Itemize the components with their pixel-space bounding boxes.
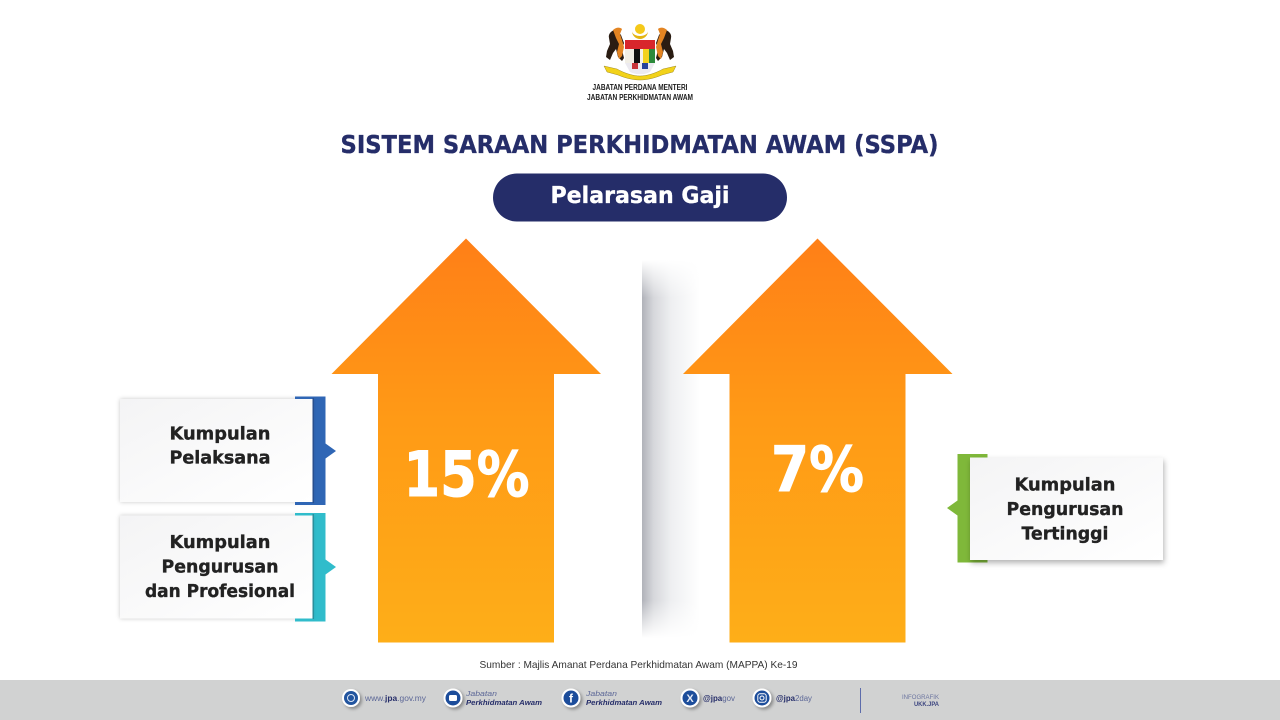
panel: Kumpulan Pengurusan Tertinggi: Pengurusan [1006, 500, 1124, 520]
logo: Malaysian coat of arms with department names [587, 24, 693, 102]
icon: facebook: f [569, 692, 574, 706]
icon: website [342, 689, 360, 707]
text: youtube: Perkhidmatan Awam [466, 698, 542, 707]
text: X handle: @jpagov [703, 694, 735, 703]
text: credit: UKK.JPA [914, 701, 939, 708]
icon: X [680, 688, 700, 708]
text: youtube [465, 689, 542, 707]
panel: Kumpulan Pelaksana [120, 396, 336, 505]
subtitle pill: Pelarasan Gaji: Pelarasan Gaji [550, 183, 730, 209]
panel: Kumpulan Pelaksana: Pelaksana [170, 448, 270, 468]
text: facebook [585, 689, 662, 707]
panel: Kumpulan Pengurusan Tertinggi: Kumpulan [1014, 476, 1116, 496]
icon: instagram [752, 688, 772, 708]
value: 15%: 15% [404, 438, 530, 511]
text: youtube: Jabatan [465, 689, 497, 698]
arrow: 15 percent [332, 238, 601, 642]
vertical divider shadow [642, 260, 700, 638]
text: facebook: Perkhidmatan Awam [586, 698, 662, 707]
value: 7%: 7% [771, 433, 864, 506]
text: website: www.jpa.gov.my [364, 694, 426, 703]
text: facebook: Jabatan [585, 689, 617, 698]
text: Jabatan Perkhidmatan Awam: JABATAN PERKHIDMATAN AWAM [587, 93, 693, 102]
panel: Kumpulan Pengurusan dan Profesional: Kumpulan [170, 533, 270, 553]
subtitle pill: Pelarasan Gaji [493, 174, 787, 222]
arrow: 7 percent [683, 238, 952, 642]
icon: facebook [562, 688, 580, 708]
text: instagram handle: @jpa2day [776, 694, 812, 703]
panel: Kumpulan Pengurusan dan Profesional: Pengurusan [162, 558, 278, 578]
footer bar [0, 680, 1280, 720]
panel: Kumpulan Pengurusan dan Profesional [120, 513, 336, 622]
text: credit [902, 694, 940, 708]
panel: Kumpulan Pengurusan Tertinggi [947, 454, 1163, 562]
panel: Kumpulan Pelaksana: Kumpulan [170, 424, 270, 444]
title: SISTEM SARAAN PERKHIDMATAN AWAM (SSPA) [340, 130, 938, 159]
icon: crest [604, 24, 676, 80]
panel: Kumpulan Pengurusan dan Profesional: dan Profesional [145, 582, 295, 602]
text: Jabatan Perdana Menteri: JABATAN PERDANA MENTERI [592, 83, 688, 92]
text: credit: INFOGRAFIK [902, 694, 940, 701]
icon: youtube [444, 688, 462, 708]
panel: Kumpulan Pengurusan Tertinggi: Tertinggi [1022, 524, 1108, 544]
icon: X: X [686, 693, 694, 705]
source note: Sumber : Majlis Amanat Perdana Perkhidmatan Awam (MAPPA) Ke-19 [480, 659, 798, 671]
